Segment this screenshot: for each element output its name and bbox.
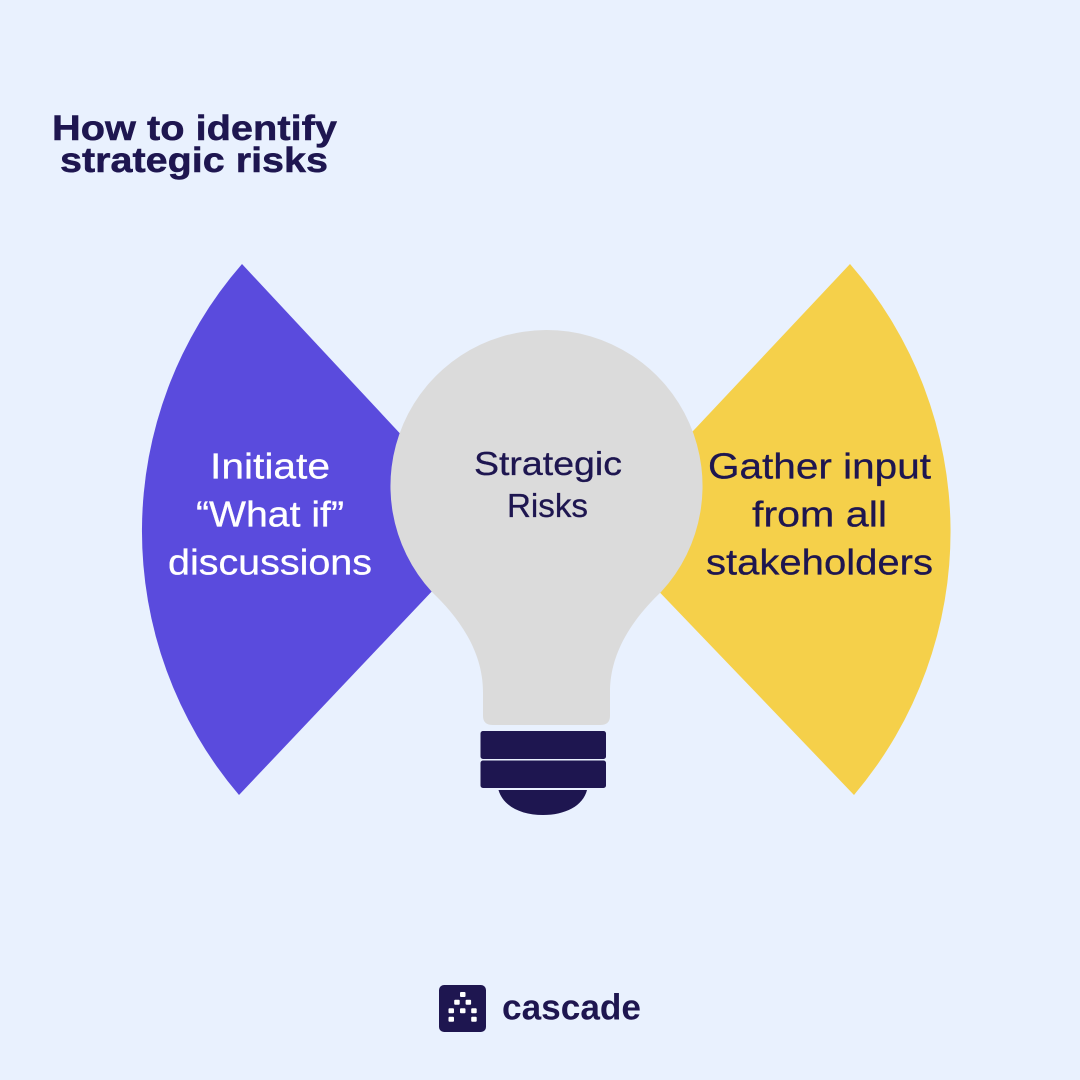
logo: cascade xyxy=(439,985,641,1032)
text: initiate what if discussions xyxy=(168,446,372,582)
logo wordmark: cascade xyxy=(502,986,641,1028)
bulb label: Strategic xyxy=(474,445,622,482)
panel: right wedge xyxy=(600,264,951,795)
bulb glass xyxy=(390,330,703,725)
text: gather input from all stakeholders xyxy=(706,446,933,582)
panel: left wedge xyxy=(142,264,490,795)
title: strategic risks xyxy=(60,140,328,180)
text: gather input from all stakeholders: Gather input xyxy=(708,446,931,486)
bulb base xyxy=(480,731,606,815)
logo mark xyxy=(439,985,486,1032)
title xyxy=(52,108,337,180)
text: initiate what if discussions: discussions xyxy=(168,542,372,582)
title: How to identify xyxy=(52,108,337,148)
text: initiate what if discussions: Initiate xyxy=(210,446,330,486)
icon: light bulb xyxy=(390,330,703,815)
text: gather input from all stakeholders: stakeholders xyxy=(706,542,933,582)
text: gather input from all stakeholders: from all xyxy=(752,494,887,534)
bulb label: Risks xyxy=(507,487,588,524)
bulb label xyxy=(474,445,622,524)
text: initiate what if discussions: “What if” xyxy=(196,494,344,534)
